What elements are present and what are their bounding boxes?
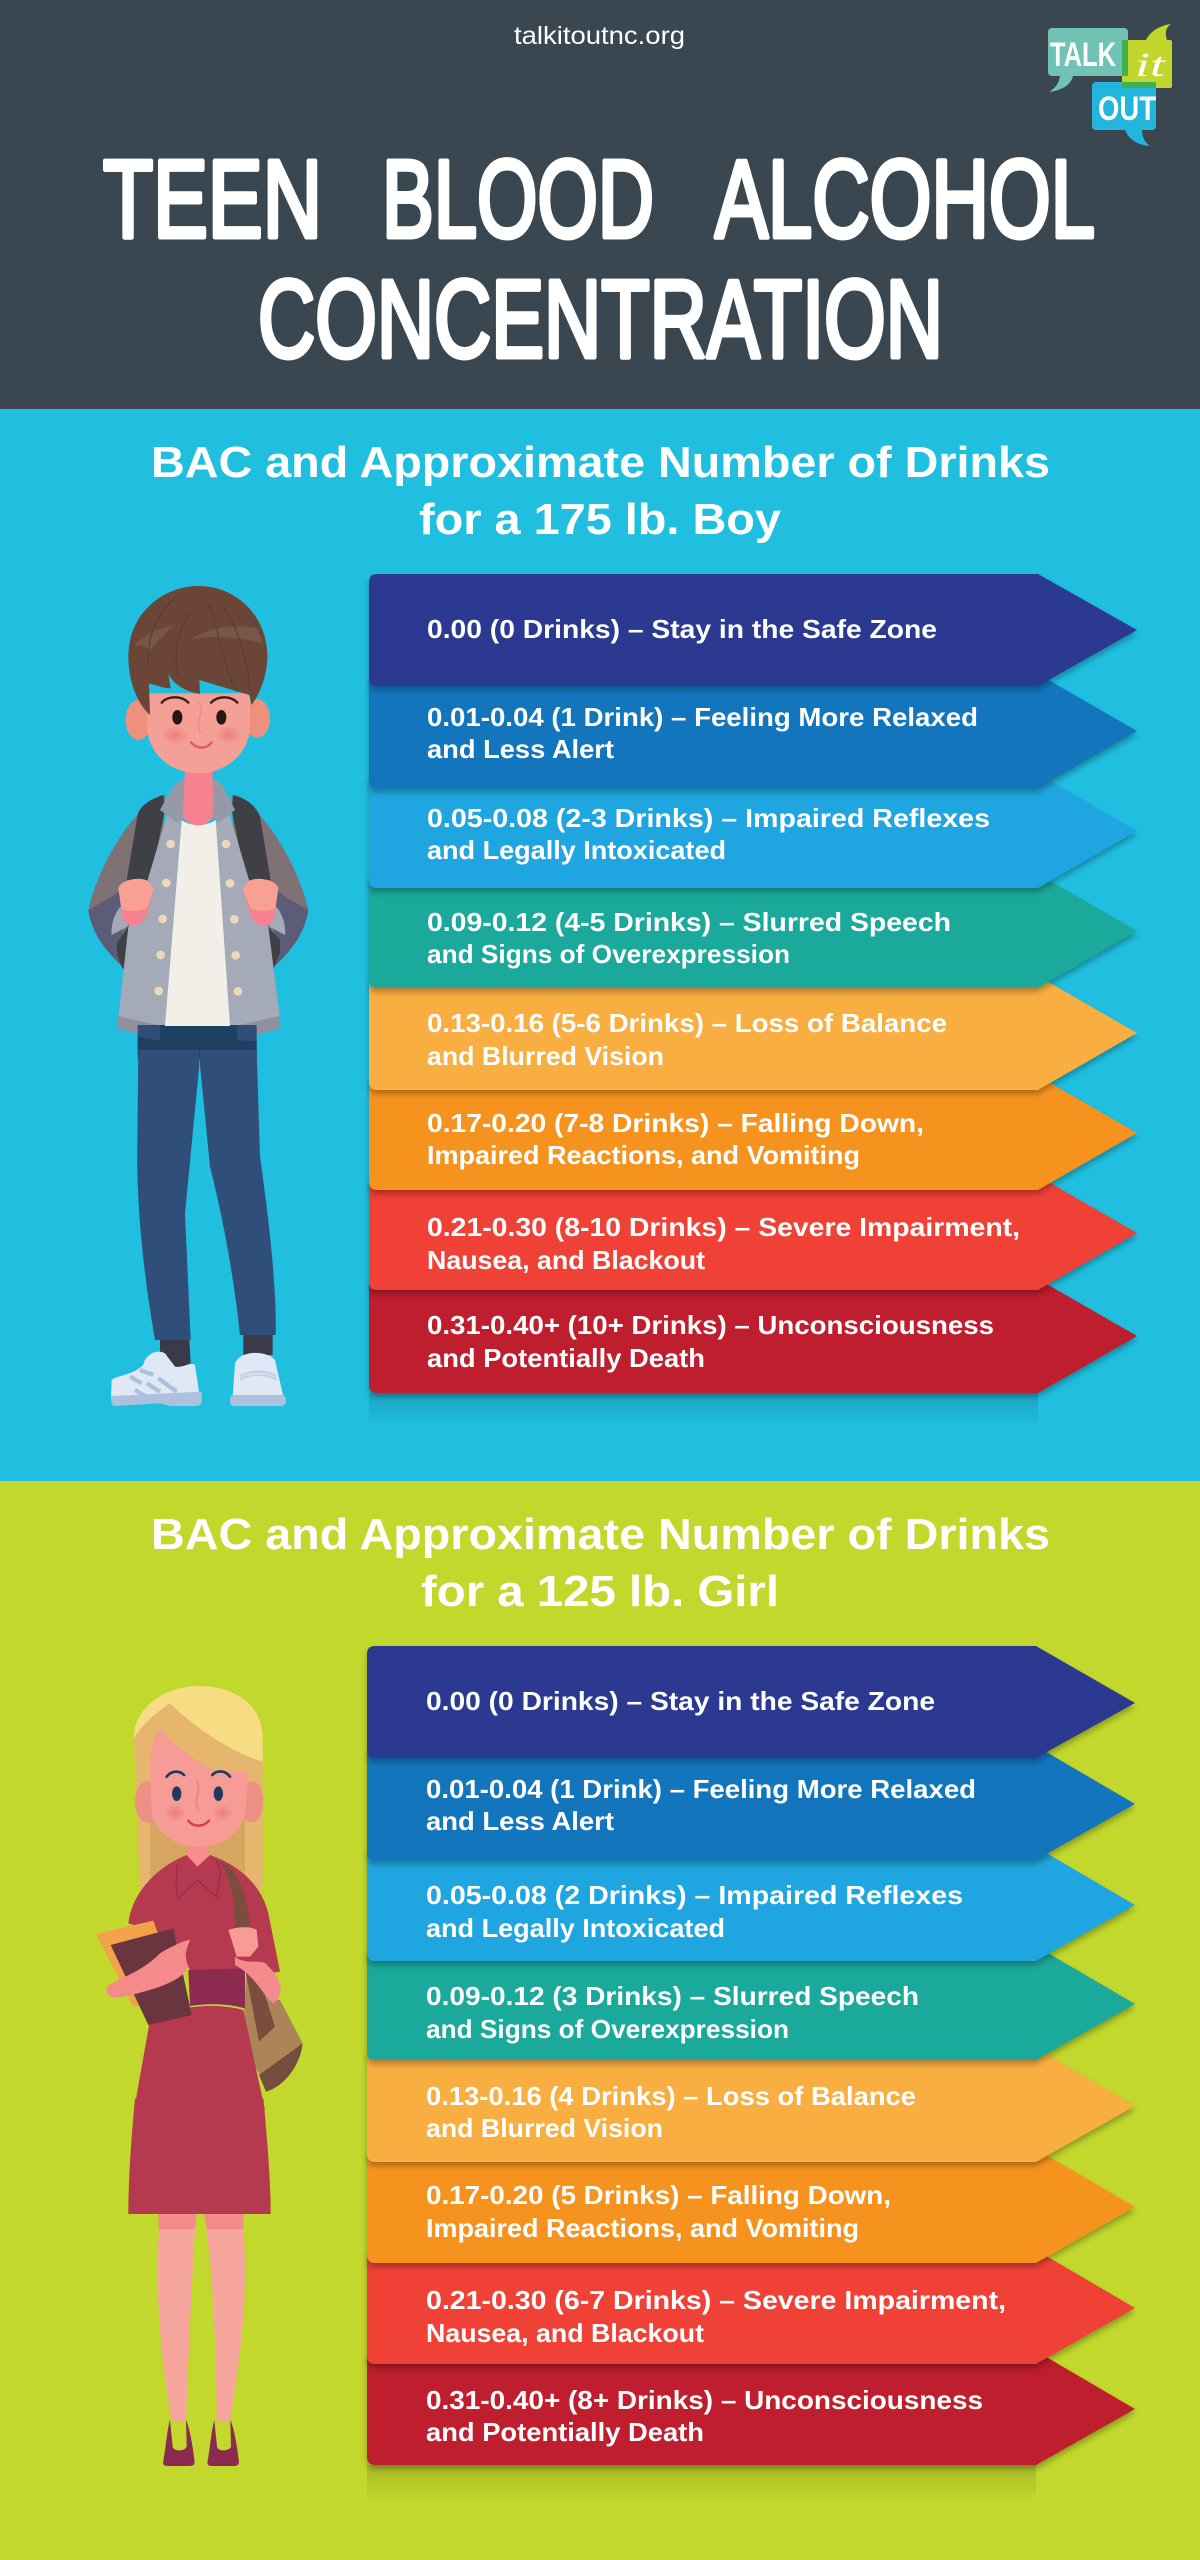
title bbox=[103, 138, 1095, 381]
arrow 6 bbox=[369, 1076, 1137, 1190]
heading: girl: for a 125 lb. Girl bbox=[421, 1567, 779, 1616]
arrow 5: 0.13-0.16 (4 Drinks) – Loss of Balance bbox=[426, 2081, 916, 2111]
arrow 8: and Potentially Death bbox=[427, 1343, 705, 1373]
arrow 3 bbox=[369, 774, 1137, 888]
arrow 4: 0.09-0.12 (3 Drinks) – Slurred Speech bbox=[426, 1981, 919, 2011]
arrow 7: Nausea, and Blackout bbox=[427, 1245, 705, 1275]
arrow 6: Impaired Reactions, and Vomiting bbox=[426, 2213, 859, 2243]
heading: boy: BAC and Approximate Number of Drinks bbox=[151, 438, 1050, 487]
arrow 5 bbox=[367, 2048, 1135, 2162]
title: BLOOD bbox=[382, 138, 654, 261]
panel: boy section bbox=[0, 409, 1200, 1481]
arrow 1: 0.00 (0 Drinks) – Stay in the Safe Zone bbox=[427, 614, 937, 644]
arrow 4: and Signs of Overexpression bbox=[426, 2014, 789, 2044]
arrow 7: 0.21-0.30 (6-7 Drinks) – Severe Impairment, bbox=[426, 2285, 1006, 2315]
arrows: girl list bbox=[367, 1646, 1135, 2501]
header panel bbox=[0, 0, 1200, 409]
heading: girl: BAC and Approximate Number of Drinks bbox=[151, 1510, 1050, 1559]
arrow 2: and Less Alert bbox=[426, 1806, 614, 1836]
arrow 8 bbox=[367, 2351, 1135, 2501]
arrow 2: 0.01-0.04 (1 Drink) – Feeling More Relaxed bbox=[427, 702, 978, 732]
arrow 7 bbox=[369, 1176, 1137, 1290]
arrow 6: 0.17-0.20 (7-8 Drinks) – Falling Down, bbox=[427, 1108, 924, 1138]
panel: girl section bbox=[0, 1481, 1200, 2560]
arrow 6 bbox=[367, 2149, 1135, 2263]
heading: boy bbox=[151, 438, 1050, 544]
arrow 1 bbox=[367, 1646, 1135, 1758]
title: TEEN bbox=[103, 138, 322, 261]
arrow 5: and Blurred Vision bbox=[427, 1041, 664, 1071]
arrow 8: 0.31-0.40+ (8+ Drinks) – Unconsciousness bbox=[426, 2385, 983, 2415]
arrow 3 bbox=[367, 1847, 1135, 1961]
logo: talk it out: TALK bbox=[1050, 36, 1116, 74]
arrow 2 bbox=[367, 1746, 1135, 1860]
arrow 2: and Less Alert bbox=[427, 734, 614, 764]
arrow 8: 0.31-0.40+ (10+ Drinks) – Unconsciousness bbox=[427, 1310, 994, 1340]
logo: talk it out: it bbox=[1135, 47, 1167, 84]
arrow 3: 0.05-0.08 (2 Drinks) – Impaired Reflexes bbox=[426, 1880, 963, 1910]
arrow 4 bbox=[367, 1946, 1135, 2060]
arrow 2: 0.01-0.04 (1 Drink) – Feeling More Relaxed bbox=[426, 1774, 976, 1804]
arrow 4 bbox=[369, 874, 1137, 988]
arrows: boy list bbox=[369, 574, 1137, 1429]
arrow 4: and Signs of Overexpression bbox=[427, 939, 790, 969]
heading: boy: for a 175 lb. Boy bbox=[419, 495, 782, 544]
figure: boy bbox=[88, 586, 308, 1406]
arrow 8 bbox=[369, 1279, 1137, 1429]
arrow 7: Nausea, and Blackout bbox=[426, 2318, 704, 2348]
title: CONCENTRATION bbox=[258, 258, 943, 381]
figure: girl bbox=[96, 1686, 303, 2466]
arrow 6: 0.17-0.20 (5 Drinks) – Falling Down, bbox=[426, 2180, 891, 2210]
arrow 7: 0.21-0.30 (8-10 Drinks) – Severe Impairment, bbox=[427, 1212, 1020, 1242]
arrow 5 bbox=[369, 976, 1137, 1090]
arrow 1: 0.00 (0 Drinks) – Stay in the Safe Zone bbox=[426, 1686, 935, 1716]
arrow 3: and Legally Intoxicated bbox=[426, 1913, 725, 1943]
arrow 6: Impaired Reactions, and Vomiting bbox=[427, 1140, 860, 1170]
arrow 2 bbox=[369, 674, 1137, 788]
logo: talk it out: OUT bbox=[1098, 90, 1156, 128]
arrow 1 bbox=[369, 574, 1137, 686]
arrow 5: 0.13-0.16 (5-6 Drinks) – Loss of Balance bbox=[427, 1008, 947, 1038]
arrow 4: 0.09-0.12 (4-5 Drinks) – Slurred Speech bbox=[427, 907, 951, 937]
arrow 3: and Legally Intoxicated bbox=[427, 835, 726, 865]
arrow 3: 0.05-0.08 (2-3 Drinks) – Impaired Reflexes bbox=[427, 803, 990, 833]
arrow 5: and Blurred Vision bbox=[426, 2113, 663, 2143]
logo: talk it out bbox=[1048, 24, 1172, 146]
arrow 7 bbox=[367, 2250, 1135, 2364]
website url: talkitoutnc.org bbox=[514, 22, 685, 50]
arrow 8: and Potentially Death bbox=[426, 2417, 704, 2447]
heading: girl bbox=[151, 1510, 1050, 1616]
